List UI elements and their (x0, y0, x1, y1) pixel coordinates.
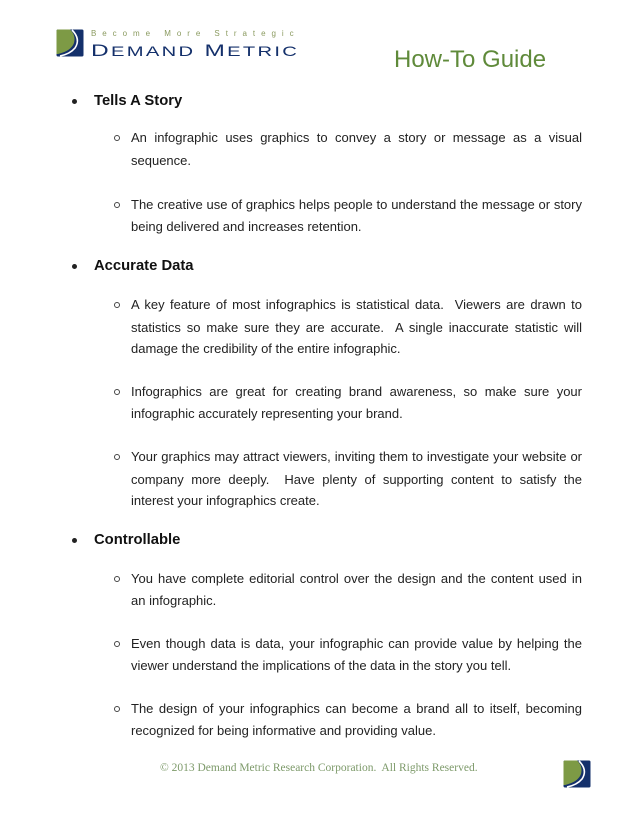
logo wordmark: DEMAND METRIC (91, 41, 299, 60)
text block: control points: viewer understand the implications of the data in the story you tell. (131, 658, 511, 673)
text block: data points: A key feature of most infographics is statistical data. Viewers are drawn to (131, 297, 582, 312)
text block: data points: statistics so make sure they are accurate. A single inaccurate statistic will (131, 320, 582, 335)
logo tagline: Become More Strategic (91, 29, 300, 38)
text block: data points: Your graphics may attract viewers, inviting them to investigate your website or (131, 449, 582, 464)
logo: Demand Metric (56, 29, 300, 60)
heading: Accurate Data: Accurate Data (94, 258, 194, 274)
footer copyright: © 2013 Demand Metric Research Corporation. All Rights Reserved. (160, 762, 478, 774)
text block: control points: an infographic. (131, 593, 216, 608)
title: How-To Guide (394, 46, 546, 73)
text block: story points: The creative use of graphics helps people to understand the message or story (131, 197, 582, 212)
heading: Tells A Story: Tells A Story (94, 93, 182, 109)
text block: story points: being delivered and increases retention. (131, 219, 362, 234)
text block: data points: company more deeply. Have plenty of supporting content to satisfy the (131, 472, 582, 487)
text block: story points: An infographic uses graphics to convey a story or message as a visual (131, 130, 582, 145)
text block: data points: infographic accurately representing your brand. (131, 406, 403, 421)
text block: control points: The design of your infographics can become a brand all to itself, becoming (131, 701, 582, 716)
icon: footer logo (564, 760, 590, 788)
text block: control points: recognized for being informative and providing value. (131, 723, 436, 738)
text block: data points: interest your infographics create. (131, 493, 320, 508)
logo icon (56, 30, 84, 56)
text block: data points: Infographics are great for creating brand awareness, so make sure your (131, 384, 582, 399)
text block: control points: Even though data is data, your infographic can provide value by helping the (131, 636, 582, 651)
heading: Controllable: Controllable (94, 532, 180, 548)
text block: story points: sequence. (131, 153, 191, 168)
text block: control points: You have complete editorial control over the design and the content used in (131, 571, 582, 586)
text block: data points: damage the credibility of the entire infographic. (131, 341, 401, 356)
